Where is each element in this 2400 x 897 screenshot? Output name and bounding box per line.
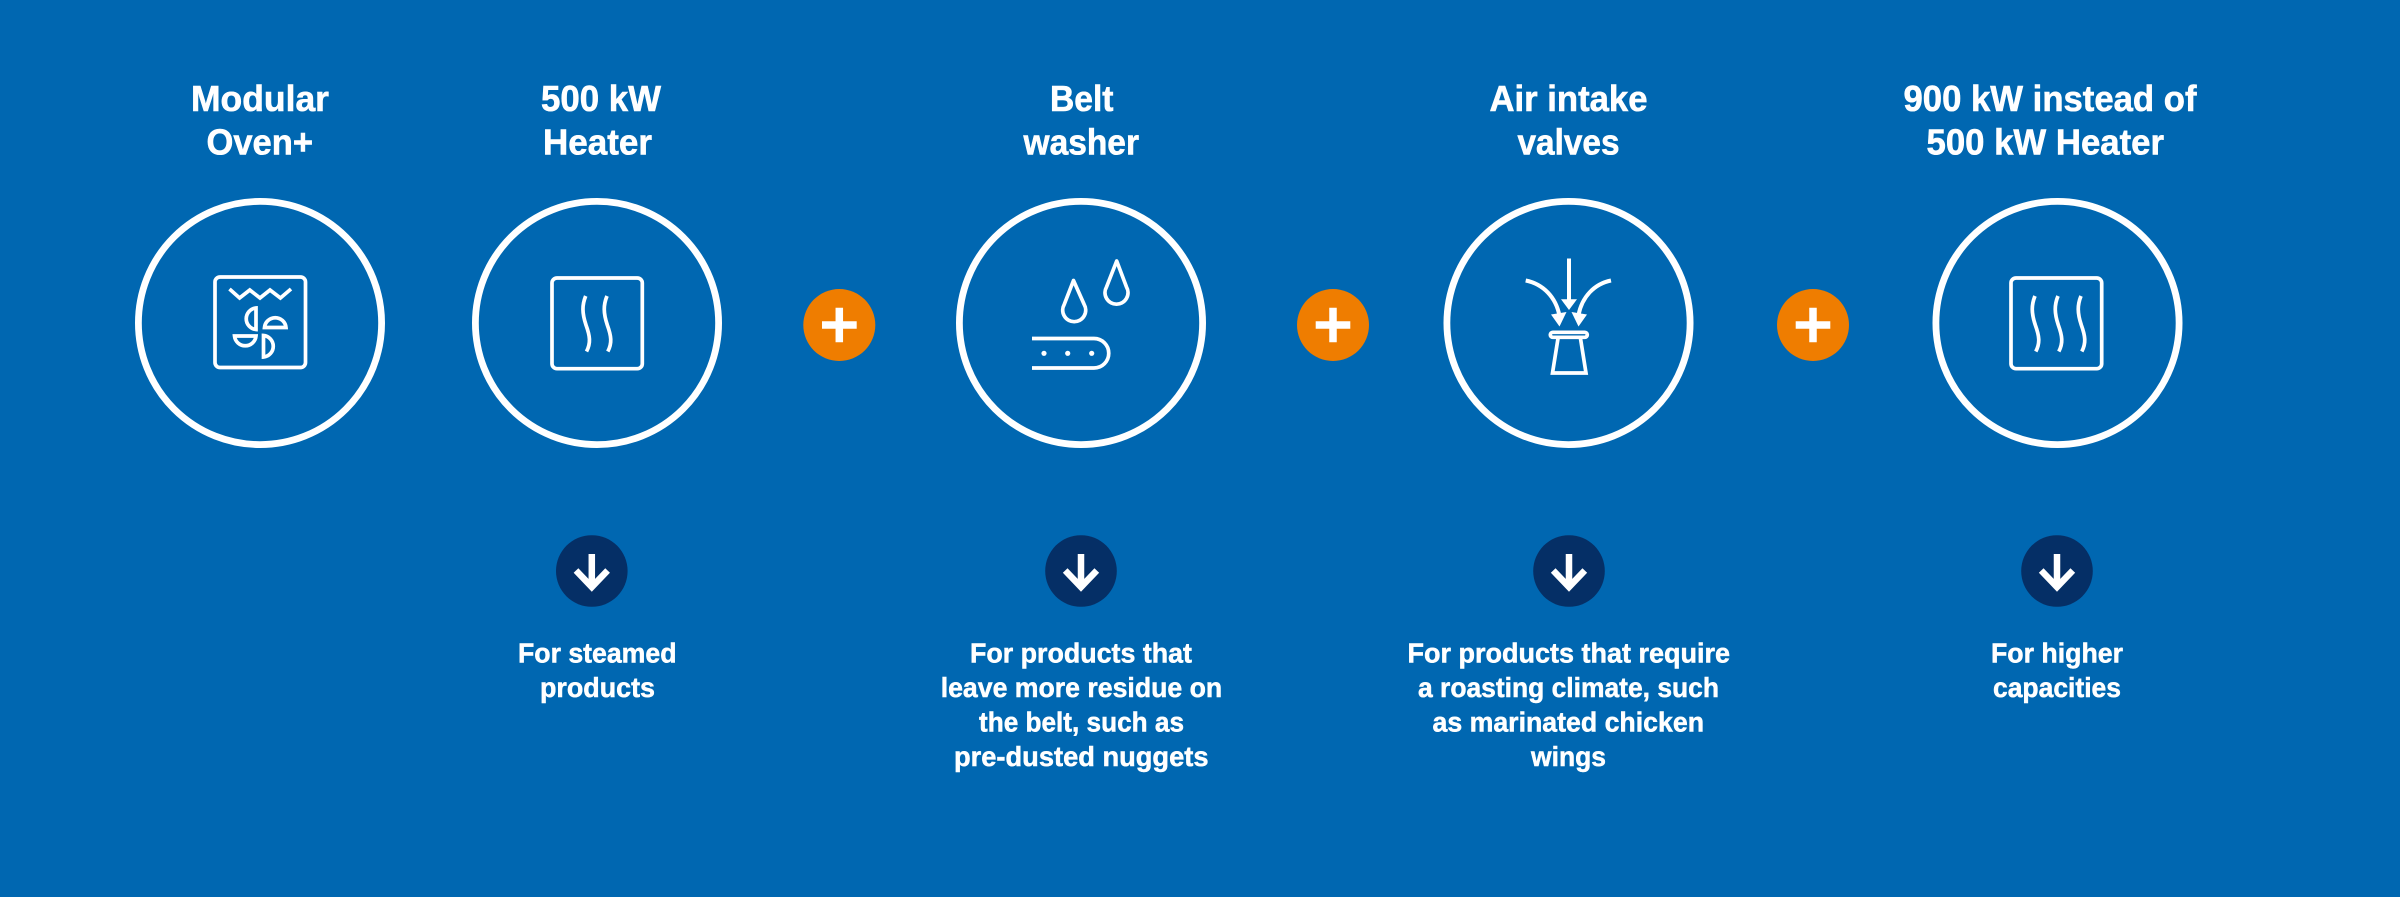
heading: Belt washer bbox=[1023, 78, 1139, 162]
heading: 900 kW instead of 500 kW Heater: 900 kW instead of bbox=[1904, 78, 2197, 119]
down arrow badge bbox=[1533, 535, 1605, 607]
icon: heater two waves bbox=[552, 278, 642, 369]
heading: Belt washer: Belt bbox=[1050, 78, 1114, 119]
panel: Air intake valves bbox=[1408, 78, 1730, 772]
heading: Air intake valves: valves bbox=[1518, 122, 1620, 162]
heading: 500 kW Heater: Heater bbox=[543, 122, 652, 162]
heading: Air intake valves bbox=[1490, 78, 1648, 162]
description: residue products bbox=[941, 638, 1222, 772]
heading: 500 kW Heater bbox=[541, 78, 661, 162]
plus badge 2 bbox=[1297, 289, 1369, 361]
circle outline bbox=[1936, 201, 2179, 445]
icon: oven with fan bbox=[215, 277, 306, 368]
description: steamed products: For steamed bbox=[518, 638, 676, 668]
heading: Belt washer: washer bbox=[1023, 122, 1139, 162]
description: residue products: leave more residue on bbox=[941, 672, 1222, 703]
description: residue products: the belt, such as bbox=[979, 706, 1184, 738]
panel: 900 kW Heater bbox=[1904, 78, 2197, 703]
description: steamed products: products bbox=[540, 672, 655, 703]
plus badge 1 bbox=[803, 289, 875, 361]
panel: Belt washer bbox=[941, 78, 1222, 772]
circle outline bbox=[959, 201, 1203, 445]
panel: Modular Oven+ bbox=[138, 78, 382, 445]
icon: belt with droplets bbox=[1032, 261, 1128, 368]
heading: Modular Oven+: Modular bbox=[191, 78, 329, 119]
description: roasting products: For products that require bbox=[1408, 638, 1730, 668]
circle outline bbox=[475, 201, 719, 445]
heading: 900 kW instead of 500 kW Heater: 500 kW Heater bbox=[1926, 122, 2164, 162]
circle outline bbox=[1447, 201, 1690, 445]
description: roasting products: a roasting climate, such bbox=[1418, 672, 1719, 703]
description: roasting products bbox=[1408, 638, 1730, 772]
description: higher capacities bbox=[1991, 638, 2123, 703]
down arrow badge bbox=[1045, 535, 1117, 607]
description: higher capacities: For higher bbox=[1991, 638, 2123, 668]
description: roasting products: wings bbox=[1530, 741, 1606, 772]
heading: 900 kW instead of 500 kW Heater bbox=[1904, 78, 2197, 162]
circle outline bbox=[138, 201, 382, 445]
icon: air intake valve bbox=[1526, 258, 1611, 373]
heading: Modular Oven+ bbox=[191, 78, 329, 162]
heading: Modular Oven+: Oven+ bbox=[206, 122, 313, 162]
down arrow badge bbox=[556, 535, 628, 607]
description: higher capacities: capacities bbox=[1993, 672, 2121, 703]
panel: 500 kW Heater bbox=[475, 78, 719, 703]
description: residue products: For products that bbox=[970, 638, 1192, 668]
description: residue products: pre-dusted nuggets bbox=[954, 741, 1208, 772]
heading: Air intake valves: Air intake bbox=[1490, 78, 1648, 119]
description: roasting products: as marinated chicken bbox=[1432, 706, 1704, 738]
description: steamed products bbox=[518, 638, 676, 703]
heading: 500 kW Heater: 500 kW bbox=[541, 78, 661, 119]
down arrow badge bbox=[2021, 535, 2093, 607]
icon: heater three waves bbox=[2011, 278, 2102, 369]
plus badge 3 bbox=[1777, 289, 1849, 361]
